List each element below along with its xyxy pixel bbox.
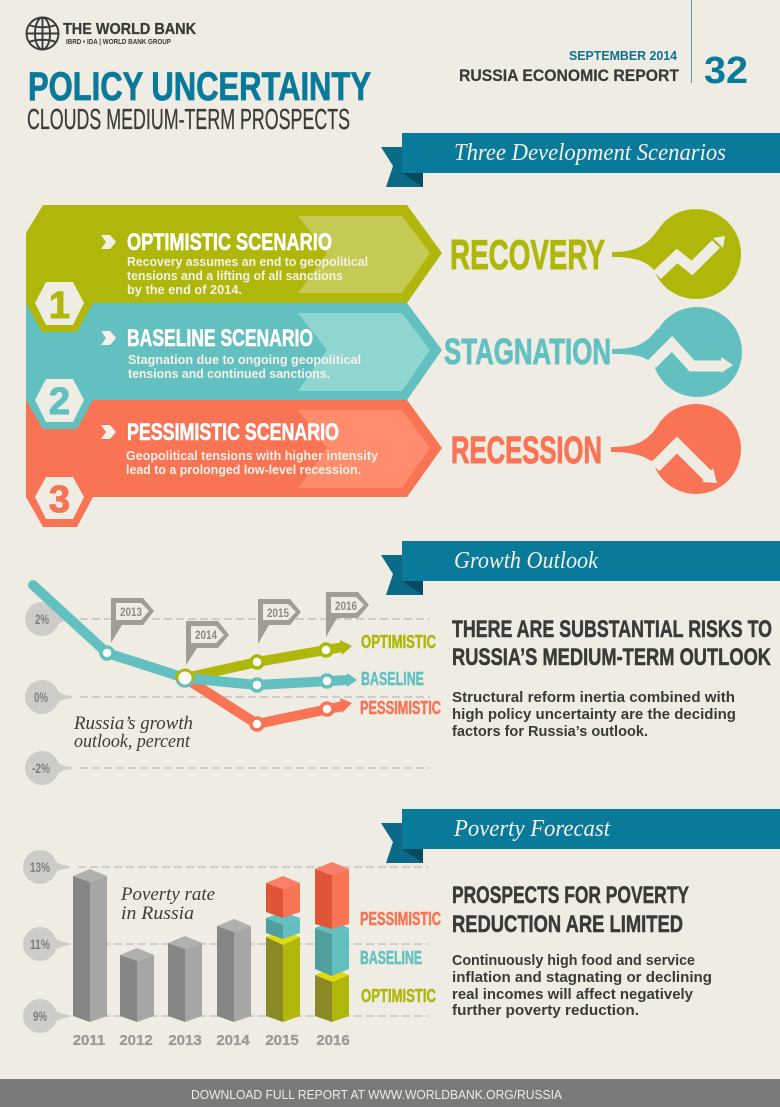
label: stagnation: STAGNATION bbox=[444, 331, 611, 372]
optimistic line bbox=[185, 640, 352, 678]
footer bar bbox=[0, 1079, 780, 1107]
icon: number 3 hexagon: 3 bbox=[49, 479, 70, 521]
year flags: 2016 bbox=[335, 599, 357, 613]
header: World Bank logo bbox=[26, 18, 197, 50]
icon: recession bubble with falling arrow bbox=[611, 404, 741, 494]
report date and name: RUSSIA ECONOMIC REPORT bbox=[459, 67, 679, 85]
text block: poverty prospects bbox=[452, 882, 712, 1019]
line labels: BASELINE bbox=[361, 669, 424, 689]
text block: growth risks bbox=[452, 616, 772, 740]
text block: poverty prospects: real incomes will affect negatively bbox=[452, 986, 694, 1003]
bar chart: poverty rate in Russia bbox=[23, 850, 441, 1049]
bar labels: OPTIMISTIC bbox=[361, 986, 436, 1006]
icon: number 3 hexagon bbox=[35, 477, 84, 521]
axis ticks: 13% bbox=[30, 860, 50, 875]
text block: poverty prospects: further poverty reduction. bbox=[452, 1002, 639, 1019]
panel: coral pessimistic scenario: lead to a prolonged low-level recession. bbox=[126, 462, 361, 477]
year labels: 2016 bbox=[316, 1032, 350, 1049]
panel: teal baseline scenario: BASELINE SCENARIO bbox=[127, 325, 313, 352]
banner: Three Development Scenarios bbox=[381, 133, 780, 187]
report date and name: SEPTEMBER 2014 bbox=[569, 48, 678, 63]
banner: Growth Outlook bbox=[381, 541, 780, 595]
bar labels: PESSIMISTIC bbox=[360, 909, 441, 929]
icon: number 1 hexagon: 1 bbox=[49, 285, 70, 327]
label: recession: RECESSION bbox=[451, 430, 602, 472]
axis ticks: 9% bbox=[33, 1009, 47, 1024]
label: recovery: RECOVERY bbox=[450, 231, 605, 278]
banner: Growth Outlook: Growth Outlook bbox=[454, 548, 598, 574]
axis ticks: 0% bbox=[34, 690, 48, 705]
line labels: OPTIMISTIC bbox=[361, 632, 436, 652]
text block: growth risks: Structural reform inertia combined with bbox=[452, 689, 735, 706]
year flags: 2013 bbox=[120, 605, 142, 619]
icon: chevron bbox=[101, 331, 116, 345]
chart caption: Russia’s growth bbox=[73, 713, 193, 734]
panel: green optimistic scenario: tensions and a lifting of all sanctions bbox=[127, 268, 343, 283]
year labels: 2011 bbox=[73, 1032, 105, 1049]
title: POLICY UNCERTAINTY bbox=[28, 65, 371, 109]
subtitle: CLOUDS MEDIUM-TERM PROSPECTS bbox=[27, 104, 350, 136]
year labels: 2015 bbox=[265, 1032, 299, 1049]
text block: poverty prospects: inflation and stagnating or declining bbox=[452, 969, 712, 986]
panel: teal baseline scenario: tensions and continued sanctions. bbox=[128, 366, 330, 381]
chart caption: outlook, percent bbox=[74, 731, 191, 752]
footer bar: DOWNLOAD FULL REPORT AT WWW.WORLDBANK.ORG/RUSSIA bbox=[191, 1087, 562, 1102]
chart caption: in Russia bbox=[121, 903, 194, 924]
icon: stagnation bubble with flat arrow bbox=[612, 307, 742, 397]
panel: green optimistic scenario: OPTIMISTIC SCENARIO bbox=[127, 229, 332, 256]
year labels: 2012 bbox=[119, 1032, 153, 1049]
node 2014 bbox=[177, 670, 193, 686]
bar labels bbox=[360, 909, 441, 1006]
panel: coral pessimistic scenario: Geopolitical tensions with higher intensity bbox=[126, 448, 379, 463]
axis ticks bbox=[23, 850, 428, 1033]
bar 2011 bbox=[73, 869, 107, 1022]
panel: teal baseline scenario bbox=[26, 303, 442, 429]
icon: globe bbox=[26, 18, 58, 50]
banner: Poverty Forecast bbox=[381, 809, 780, 863]
panel: green optimistic scenario: Recovery assumes an end to geopolitical bbox=[127, 254, 368, 269]
baseline line bbox=[33, 585, 357, 691]
text block: poverty prospects: REDUCTION ARE LIMITED bbox=[452, 911, 683, 938]
bar labels: BASELINE bbox=[360, 948, 422, 968]
text block: growth risks: factors for Russia’s outlook. bbox=[452, 723, 648, 740]
panel: green optimistic scenario: by the end of 2014. bbox=[127, 282, 242, 297]
bar 2012 bbox=[120, 948, 154, 1022]
line labels: PESSIMISTIC bbox=[360, 698, 441, 718]
icon: number 2 hexagon bbox=[35, 379, 84, 423]
year flags: 2014 bbox=[195, 628, 217, 642]
text block: growth risks: high policy uncertainty are the deciding bbox=[452, 706, 736, 723]
icon: recovery bubble with rising arrow bbox=[612, 209, 741, 299]
icon: chevron bbox=[101, 425, 116, 439]
header: World Bank logo: THE WORLD BANK bbox=[63, 21, 197, 38]
axis ticks: 11% bbox=[30, 937, 50, 952]
bar 2014 bbox=[217, 919, 251, 1022]
banner: Poverty Forecast: Poverty Forecast bbox=[453, 816, 611, 842]
stacked bar 2016 bbox=[315, 862, 349, 1022]
panel: coral pessimistic scenario: PESSIMISTIC SCENARIO bbox=[127, 419, 339, 446]
year flags: 2015 bbox=[267, 606, 289, 620]
panel: green optimistic scenario bbox=[26, 205, 442, 332]
report date and name bbox=[459, 48, 679, 85]
header: World Bank logo: IBRD • IDA | WORLD BANK GROUP bbox=[66, 37, 171, 46]
icon: number 2 hexagon: 2 bbox=[49, 381, 70, 423]
year labels: 2014 bbox=[216, 1032, 250, 1049]
icon: number 1 hexagon bbox=[35, 282, 84, 327]
pessimistic line bbox=[185, 678, 352, 730]
line labels bbox=[360, 632, 441, 718]
panel: teal baseline scenario: Stagnation due to ongoing geopolitical bbox=[128, 352, 361, 367]
year flags bbox=[111, 592, 369, 665]
axis ticks bbox=[25, 602, 430, 785]
chart caption: Poverty rate bbox=[120, 884, 215, 905]
year labels: 2013 bbox=[168, 1032, 202, 1049]
stacked bar 2015 bbox=[266, 876, 300, 1022]
bar 2013 bbox=[168, 936, 202, 1022]
banner: Three Development Scenarios: Three Development Scenarios bbox=[454, 140, 726, 166]
axis ticks: -2% bbox=[32, 761, 50, 776]
icon: chevron bbox=[101, 235, 116, 249]
page number: 32 bbox=[704, 50, 748, 92]
axis ticks: 2% bbox=[35, 612, 49, 627]
year labels bbox=[73, 1032, 350, 1049]
text block: poverty prospects: PROSPECTS FOR POVERTY bbox=[452, 882, 689, 909]
line chart: Russia's growth outlook bbox=[25, 585, 441, 785]
text block: poverty prospects: Continuously high food and service bbox=[452, 952, 695, 969]
panel: coral pessimistic scenario bbox=[26, 400, 442, 527]
